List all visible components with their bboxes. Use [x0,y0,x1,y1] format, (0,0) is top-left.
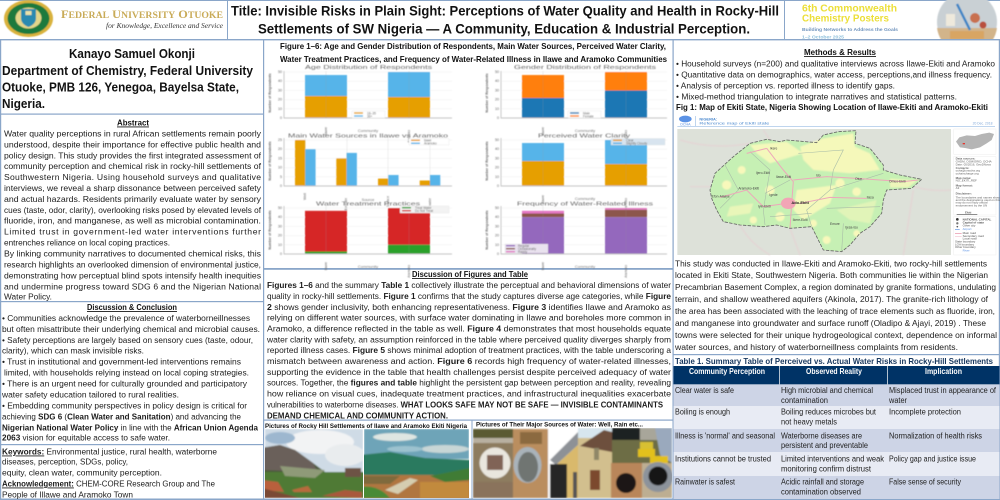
chart: age distribution: Aramoko [407,130,411,143]
map legend panel: Capital of state [963,221,984,225]
chart: water treatment practices: Treat Water [415,206,433,210]
panel: keywords and acknowledgement [2,446,217,500]
map notes panel: Map format: [956,183,973,187]
map body [677,129,951,255]
chart: gender distribution: 10 [495,107,499,111]
chart: gender distribution: Community [575,128,595,133]
abstract text: Limited trust in government-led water interventions further [4,227,261,237]
chart: frequency of water-related illness: 0 [497,252,499,256]
chart: main water sources: 10 [278,166,282,170]
map body: Iyin-Ekiti [758,205,771,209]
table header row: Implication [925,367,962,376]
map notes panel [954,156,1000,215]
chart: age distribution: Ilawe [324,127,328,135]
map legend panel: NATIONAL CAPITAL [963,217,992,221]
study area text: water sources, and history of waterborneillness complaints from residents. [674,342,958,352]
map legend panel: Other boundary [955,245,976,249]
university motto: for Knowledge, Excellence and Service [106,22,223,30]
map notes panel: Disclaimer: [956,191,972,195]
affiliation: Department of Chemistry, Federal University [2,64,253,78]
chart: main water sources: Ilawe [424,138,432,142]
chart: frequency of water-related illness: Frequency of Water-Related Illness [517,202,653,208]
chart: main water sources: 25 [278,138,282,142]
table row: boiling [674,406,1000,429]
keywords [2,446,217,478]
table row: clear water: contamination [781,396,828,405]
university logo banner [4,0,223,37]
chart: main water sources: Aramoko [424,142,437,146]
chart: water treatment practices: Do Not Treat [415,209,433,213]
table row: illness [674,429,1000,452]
panel: pictures of settlements [262,423,472,499]
chart: frequency of water-related illness: Ilawe [541,262,545,270]
abstract text: Water quality perceptions in rural African settlements remain poorly [4,128,262,138]
table row: rainwater: Rainwater is safest [675,478,736,486]
abstract text: Southwestern Nigeria. Using household surveys and qualitative [4,172,261,182]
study area text: This study was conducted in Ilawe-Ekiti and Aramoko-Ekiti, two rocky-hill settlements [675,258,987,268]
map body: Igede [769,193,778,197]
methods bullets [676,58,995,101]
methods bullets: • Mixed-method triangulation to integrate narratives and statistical patterns. [676,91,957,101]
chart: age distribution: Community [358,128,378,133]
chart: perceived water clarity: 40 [495,147,499,151]
conclusion bullets: but often misattribute their underlying chemical and microbial causes. [2,324,260,334]
chart: main water sources: Well [303,193,307,200]
abstract text: research highlights an overlooked dimension of environmental justice, [4,259,261,269]
map body: Emure [830,222,840,226]
chart: age distribution: Number of Respondents [268,73,272,113]
table row: rainwater: False sense of security [889,478,961,486]
table row: institutions: Institutions cannot be trusted [675,454,771,464]
chart: perceived water clarity: Clear [626,138,635,142]
figures heading: Water Treatment Practices, and Frequency of Water-Related Illness in Ilawe and Aramoko Communities [280,55,667,64]
map legend panel: Airport [963,227,972,231]
map notes panel: ochaincharge.org [956,171,979,175]
chart: water treatment practices: Water Treatment Practices [316,202,420,208]
chart: water treatment practices: 30 [278,224,282,228]
conclusion bullets [1,313,260,442]
table row: boiling: Incomplete protection [889,408,961,416]
chart: frequency of water-related illness: Community [575,264,595,269]
table row: illness: Normalization of health risks [889,432,982,440]
map legend panel: Main road [963,231,976,235]
discussion heading: Discussion & Conclusion [87,302,177,312]
map body: Ijero-Ekiti [756,171,770,175]
study area text: the area has been associated with the leaching of trace elements such as fluoride, iron, [675,306,995,316]
map notes panel: GADM, OSM/GRID, OCHA [956,160,992,164]
conclusion bullets: Nigerian National Water Policy in line with the African Union Agenda [2,423,258,433]
chart: main water sources: 0 [280,184,282,188]
chart: main water sources: Rainwater [428,197,432,212]
chart: perceived water clarity: Perceived Water Clarity [538,134,630,140]
abstract text: fluoride, iron, and manganese, as well as microbial contamination. [4,216,261,226]
keywords: diseases, perception, SDGs, policy, [2,456,128,466]
table row: clear water: Clear water is safe [675,386,735,395]
chart: gender distribution: 0 [497,116,499,120]
map body: Ijesa-Isu [845,226,858,230]
map notes panel: Date: 05/2016, GeoDNova [956,162,991,166]
map notes panel: and the designations used on this [956,198,1000,202]
map body: Ilawe-Ekiti [776,175,791,179]
author name: Kanayo Samuel Okonji [69,47,195,61]
keywords: equity, clean water, community perception. [2,468,162,478]
map body: Ado-Ekiti [791,200,809,205]
chart: frequency of water-related illness: Regular [518,244,530,248]
chart: gender distribution: Ilawe [541,127,545,135]
chart: perceived water clarity: 0 [497,184,499,188]
discussion text: relying on different water sources, with surface water dominating in Ilawe and boreholes more common in [267,313,671,323]
title: Title: Invisible Risks in Plain Sight: Perceptions of Water Quality and Health in Rocky-Hill [231,2,779,18]
map legend panel: LGA boundary [955,242,975,246]
conclusion bullets: 2063 vision for equitable access to safe water. [2,432,170,442]
chart: frequency of water-related illness: 50 [495,206,499,210]
chart: frequency of water-related illness: 20 [495,234,499,238]
acknowledgement: People of Illawe and Aramoko Town [2,490,133,500]
title: Settlements of SW Nigeria — A Community, Education & Industrial Perception. [258,20,750,36]
map caption: Fig 1: Map of Ekiti State, Nigeria Showing Location of Ilawe-Ekiti and Aramoko-Ekiti [676,103,988,112]
table row: institutions: monitoring confirm distrust [781,464,872,474]
chart: frequency of water-related illness: Aramoko [624,265,628,278]
chart: gender distribution: Female [583,114,594,118]
map body: Efon-Alaaye [712,195,730,199]
study area text: and manganese into groundwater and surface runoff (Oladipo & Ajayi, 2019) . These [675,318,986,328]
abstract text: Water Policy. [4,292,52,302]
map notes panel: Data sources: [956,156,975,160]
chart: gender distribution: 30 [495,88,499,92]
water sources caption: Pictures of Their Major Sources of Water: Well, Rain etc... [476,422,643,428]
map legend panel: River [963,248,970,252]
panel: table 1 summary [674,356,1000,499]
study area text: located in Ekiti State, Southwestern Nigeria. Both communities lie within the Nigerian [675,270,988,280]
conference name: 6th Commonwealth [802,2,897,14]
chart: gender distribution: 20 [495,98,499,102]
abstract text: interviews, we reveal a sharp dissonance between perceived safety [4,183,262,193]
discussion text: quality in rocky-hill settlements. Figure 1 confirms that the study captures diverse age categories, while Figure [267,291,671,301]
map legend panel [954,217,996,255]
chart: perceived water clarity: 20 [495,166,499,170]
chart: gender distribution: Aramoko [624,130,628,143]
university name: FEDERAL UNIVERSITY OTUOKE [61,7,223,21]
chart: perceived water clarity: Community [575,196,595,201]
abstract text [4,128,262,302]
map body: Otun [855,177,862,181]
chart: water treatment practices: 50 [278,206,282,210]
abstract text: and actual hazards. Residents primarily evaluate water by sensory [4,194,262,204]
chart: frequency of water-related illness: Occasionally [518,247,536,251]
map notes panel: Contacts: [956,166,969,170]
chart: perceived water clarity: 30 [495,156,499,160]
study area text [674,258,997,352]
chart: frequency of water-related illness: 40 [495,215,499,219]
chart: main water sources: Main Water Sources in Ilawe vs Aramoko [288,134,448,140]
panel: figures 1 to 6 [268,42,667,278]
chart: perceived water clarity: Slightly Cloudy [626,142,647,146]
icon: conference globe [936,0,998,39]
map inset: Nigeria locator [954,129,996,154]
discussion text [266,280,671,420]
conference banner: Chemistry Posters [802,12,889,24]
table row: illness: Illness is 'normal' and seasonal [675,432,775,440]
chart: perceived water clarity: Aramoko [624,198,628,211]
chart: gender distribution [485,65,667,143]
affiliation [2,64,253,111]
discussion text: supporting the evidence in the table that health challenges persist despite perceived adequacy of water [267,367,671,377]
table header row: Observed Reality [806,367,863,376]
abstract text: and undermine progress toward SDG 6 and the Nigerian National [4,281,261,291]
table row: rainwater: contamination observed [781,488,861,496]
map header: Reference map of Ekiti state [699,121,770,126]
discussion text: DEMAND CHEMICAL AND COMMUNITY ACTION. [267,410,448,420]
methods heading: Methods & Results [804,47,876,57]
chart: frequency of water-related illness: Rarely [518,250,528,254]
chart: gender distribution: 40 [495,79,499,83]
abstract heading: Abstract [117,118,149,128]
chart: frequency of water-related illness: 30 [495,224,499,228]
chart: age distribution: Age Distribution of Respondents [305,65,432,71]
conclusion bullets: achieving SDG 6 (Clean Water and Sanitation) and advancing the [2,412,241,422]
map notes panel: Map name: [956,176,971,180]
conclusion bullets: limited, with households relying instead on local coping strategies. [4,368,249,378]
panel: discussion of figures and table [266,269,671,420]
discussion text: reported illness cases. Figure 5 shows minimal adoption of treatment practices, with the table underscoring a [267,345,671,355]
map body: Ilasa [867,196,874,200]
panel: abstract [4,118,262,302]
chart: gender distribution: 50 [495,70,499,74]
map header: NIGERIA: [699,116,717,121]
panel: pictures of water sources [473,422,673,498]
map notes panel: map do not imply official [956,201,988,205]
conclusion bullets: • There is an urgent need for culturally grounded and participatory [2,379,248,389]
table header row [674,366,1000,384]
chart: water treatment practices: 20 [278,234,282,238]
methods bullets: • Quantitative data on demographics, water access, perceptions,and illness frequency. [676,70,992,80]
map notes panel: endorsement by the UN [956,203,987,207]
chart: main water sources [268,134,452,212]
chart: age distribution: 30 [278,88,282,92]
chart: water treatment practices: 40 [278,215,282,219]
icon: university seal [4,0,53,37]
chart: water treatment practices: 0 [280,252,282,256]
discussion text: vulnerabilities to waterborne diseases. WHAT LOOKS SAFE MAY NOT BE SAFE — INVISIBLE CONTAMINANTS [267,400,663,410]
map legend panel: Secondary road [963,234,984,238]
keywords: Keywords: Environmental justice, rural health, waterborne [2,446,217,456]
chart: frequency of water-related illness [485,202,667,278]
chart: perceived water clarity: 50 [495,138,499,142]
panel: author and affiliation [2,47,253,111]
table row: clear water [674,384,1000,406]
settlements caption: Pictures of Rocky Hill Settlements of Ilawe and Aramoko Ekiti Nigeria [265,423,467,430]
affiliation: Otuoke, PMB 126, Yenegoa, Bayelsa State, [2,80,239,94]
chart: perceived water clarity [485,134,667,211]
chart: main water sources: 20 [278,147,282,151]
map header [677,116,995,127]
chart: main water sources: Borehole [344,198,348,211]
chart: age distribution: 50 [278,70,282,74]
discussion text: how reliance on visual cues, inadequate treatment practices, and infrastructural inequalities exacerbate [267,389,671,399]
map body: Omuo-Ekiti [889,180,906,184]
discussion text: Figures 1–6 and the summary Table 1 collectively illustrate the perceptual and behavioral dimensions of water [267,280,671,290]
discussion text: 2 shows gender inclusivity, both enhancing representativeness. Figure 3 identifies Ilawe and Aramoko as [267,302,671,312]
conclusion bullets: • Trust in institutional and government-led interventions remains [2,357,241,367]
map notes panel: Ekiti [965,210,971,214]
chart: main water sources: 15 [278,156,282,160]
conference banner [802,0,998,39]
photo collage: wells, tanks and containers [473,428,673,498]
map body: Ikere [770,146,778,150]
chart: frequency of water-related illness: 10 [495,243,499,247]
map legend panel: Other city [963,224,976,228]
map body: Ido [816,174,821,178]
methods bullets: • Analysis of perception vs. reported illness to identify gaps. [676,80,895,90]
chart: water treatment practices: Community [358,264,378,269]
chart: water treatment practices: Ilawe [324,262,328,270]
abstract text: understood, despite their importance for effective public health and [4,139,261,149]
panel: methods and results [674,47,1000,352]
study area text: terrain, and shallow weathered aquifers (Akinola, 2017). The granite-rich lithology of [675,294,989,304]
panel: discussion and conclusion [1,302,260,442]
figures heading [280,42,667,64]
chart: main water sources: 5 [280,175,282,179]
conclusion bullets: • Safety perceptions are largely based on sensory cues (taste, odour, [2,335,253,345]
map notes panel: ocha@unocha.org [956,169,980,173]
chart: gender distribution: Male [583,112,590,116]
chart: gender distribution: Gender Distribution of Respondents [514,65,656,71]
map legend panel: State boundary [955,240,976,244]
discussion text: sources. Together, the figures and table highlight the persistent gap between perception and reality, revealing [267,378,671,388]
chart: age distribution: 40 [278,79,282,83]
conclusion bullets: • Communities acknowledge the prevalence of waterborneillnesses [2,313,250,323]
map notes panel: NG_EKITI_REF [956,179,977,183]
chart: water treatment practices: 10 [278,243,282,247]
chart: gender distribution: Number of Respondents [485,73,489,113]
map legend panel: Local road [963,237,977,241]
table row: rainwater: Acidic rainfall and storage [781,478,865,486]
abstract text: demonstrating how perceptual blind spots intensify health inequities [4,270,261,280]
chart: age distribution [268,65,452,143]
chart: age distribution: 10 [278,107,282,111]
conclusion bullets: clarity), which can mask invisible risks. [2,346,144,356]
table row: institutions [674,452,1000,476]
table row: illness: persistent and preventable [781,441,869,450]
chart: main water sources: Number of Respondents [268,141,272,181]
photo: town below hills [360,429,472,499]
discussion text: Aramoko, a difference reflected in the table as well. Figure 4 demonstrates that most households equate [267,324,671,334]
chart: perceived water clarity: 10 [495,175,499,179]
chart: perceived water clarity: Number of Respondents [485,141,489,181]
table row: clear water: High microbial and chemical [781,386,873,395]
table row: institutions: Limited interventions and weak [781,454,884,464]
discussion heading: Discussion of Figures and Table [412,269,528,279]
discussion text: water clarity with safety, an assumption reinforced in the table where perceived quality diverges sharply from [266,334,671,344]
affiliation: Nigeria. [2,97,45,111]
chart: age distribution: 18–35 [367,112,376,116]
table row: institutions: Policy gap and justice issue [889,454,977,464]
chart: water treatment practices: Number of Respondents [268,210,272,250]
chart: frequency of water-related illness: Number of Respondents [485,210,489,250]
conclusion bullets: water safety education tailored to rural realities. [1,390,179,400]
abstract text: entrenches reliance on local coping practices. [4,238,170,248]
chart: water treatment practices: Aramoko [407,265,411,278]
chart: main water sources: Source [362,197,375,202]
photo: rocky hill settlement [262,429,365,498]
map body: Aramoko-Ekiti [738,186,759,190]
study area text: Precambrian Basement Complex, a region dominated by granite formations, undulating [675,282,996,292]
discussion text: mismatch between awareness and action. Figure 6 records high frequency of water-related illnesses, [267,356,671,366]
table row: boiling: not heavy metals [781,418,837,426]
chart: perceived water clarity: Ilawe [541,195,545,203]
conference banner: 1–2 October 2025 [802,34,845,40]
abstract text: policy design. This study provides the first integrated assessment of [4,150,262,160]
chart: water treatment practices [268,202,452,278]
study area text: towns were selected for their unique hydrogeological context, dependence on informal [675,330,997,340]
map: Ekiti State reference map [677,116,1000,255]
chart: age distribution: 36+ [367,114,373,118]
map header: OCHA [680,122,691,126]
table row: clear water: Misplaced trust in appearance of [889,386,997,395]
map notes panel: A3 [956,186,960,190]
table row: illness: Waterborne diseases are [781,432,863,440]
table row: clear water: water [888,396,907,405]
acknowledgement [2,478,215,500]
chart: age distribution: 20 [278,98,282,102]
conference tagline: Building Networks to Address the Goals [802,27,899,32]
table row: boiling: Boiling is enough [675,408,730,416]
figures heading: Figure 1–6: Age and Gender Distribution of Respondents, Main Water Sources, Perceived Water Clarity, [280,42,666,51]
title [231,2,779,36]
conclusion bullets: • Embedding community perspectives in policy design is critical for [2,401,247,411]
acknowledgement: Acknowledgement: CHEM-CORE Research Group and The [2,478,215,488]
chart: age distribution: 0 [280,116,282,120]
map body: Ikere-Ekiti [793,218,808,222]
methods bullets: • Household surveys (n=200) and qualitative interviews across Ilawe-Ekiti and Aramoko [676,58,995,68]
table row: boiling: Boiling reduces microbes but [781,408,877,416]
chart: main water sources: Surface [386,196,390,207]
map header: 20 Dec. 2018 [973,122,993,126]
abstract text: community perception and chemical risk in rocky-hill settlements of [4,161,262,171]
abstract text: cues (taste, odor, clarity), overlooking risks posed by elevated levels of [4,205,262,215]
abstract text: By linking community narratives to documented chemical risks, this [4,248,261,258]
table row: rainwater [674,476,1000,499]
table header row: Community Perception [689,367,765,376]
